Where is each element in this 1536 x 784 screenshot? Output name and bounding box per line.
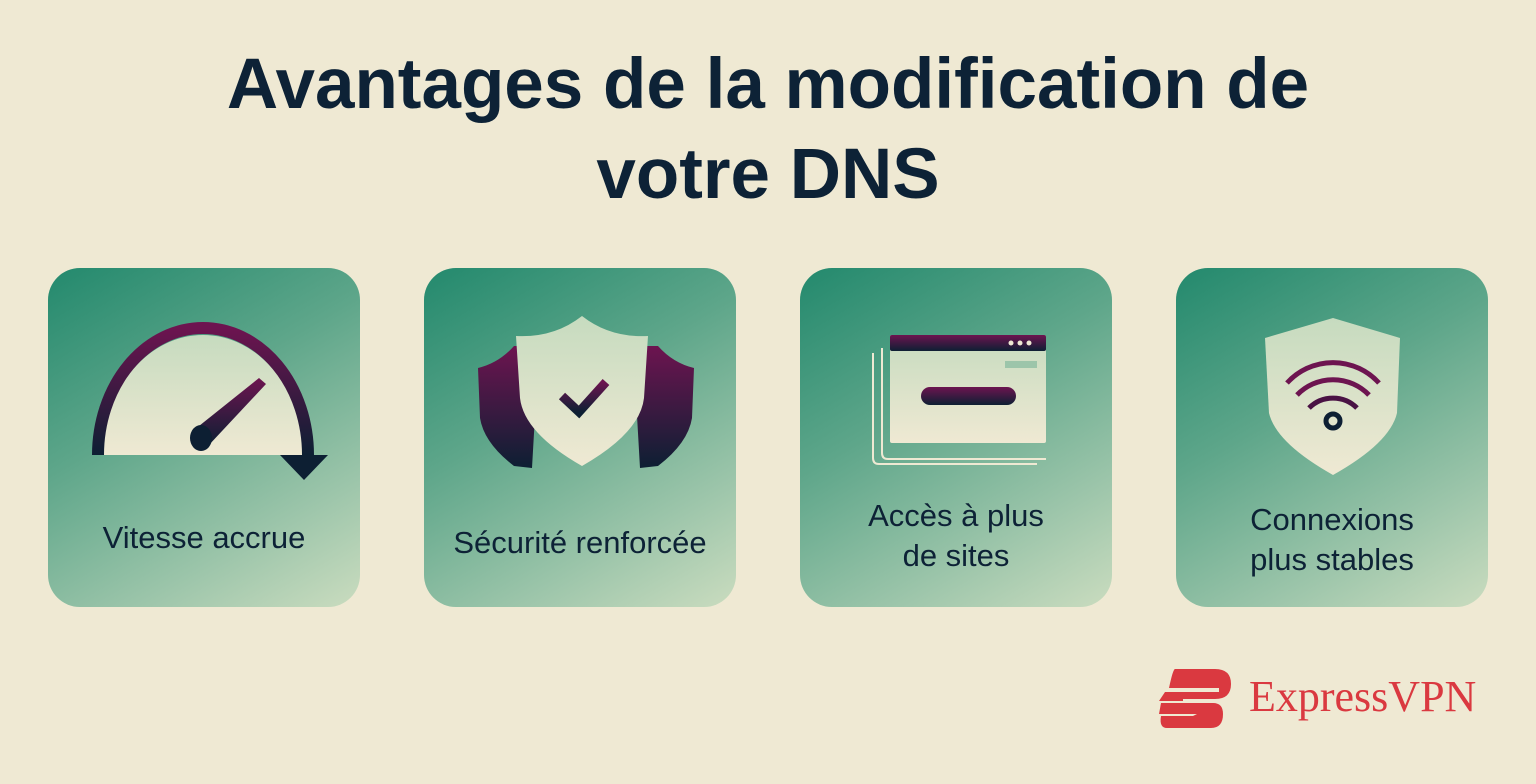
panel: security: [424, 268, 736, 607]
icon: shields with check: [478, 316, 694, 468]
panel: speed: [48, 268, 360, 607]
panel: stable connections: [1176, 268, 1488, 607]
text: brand name: ExpressVPN: [1249, 672, 1476, 721]
logo: ExpressVPN: [1159, 669, 1476, 728]
label: Accès à plus: [868, 498, 1044, 533]
icon: browser window: [872, 335, 1046, 465]
title: [227, 45, 1309, 214]
title: Avantages de la modification de: [227, 45, 1309, 124]
label: Sécurité renforcée: [453, 525, 707, 560]
label: de sites: [903, 538, 1009, 573]
label: plus stables: [1250, 542, 1414, 577]
label: Connexions: [1250, 502, 1414, 537]
label: Vitesse accrue: [103, 520, 305, 555]
icon: speedometer: [92, 322, 328, 480]
panel: access: [800, 268, 1112, 607]
label: [1250, 502, 1414, 577]
icon: logo mark: [1159, 669, 1231, 728]
title: votre DNS: [596, 135, 940, 214]
label: [868, 498, 1044, 573]
icon: wifi shield: [1265, 318, 1400, 475]
